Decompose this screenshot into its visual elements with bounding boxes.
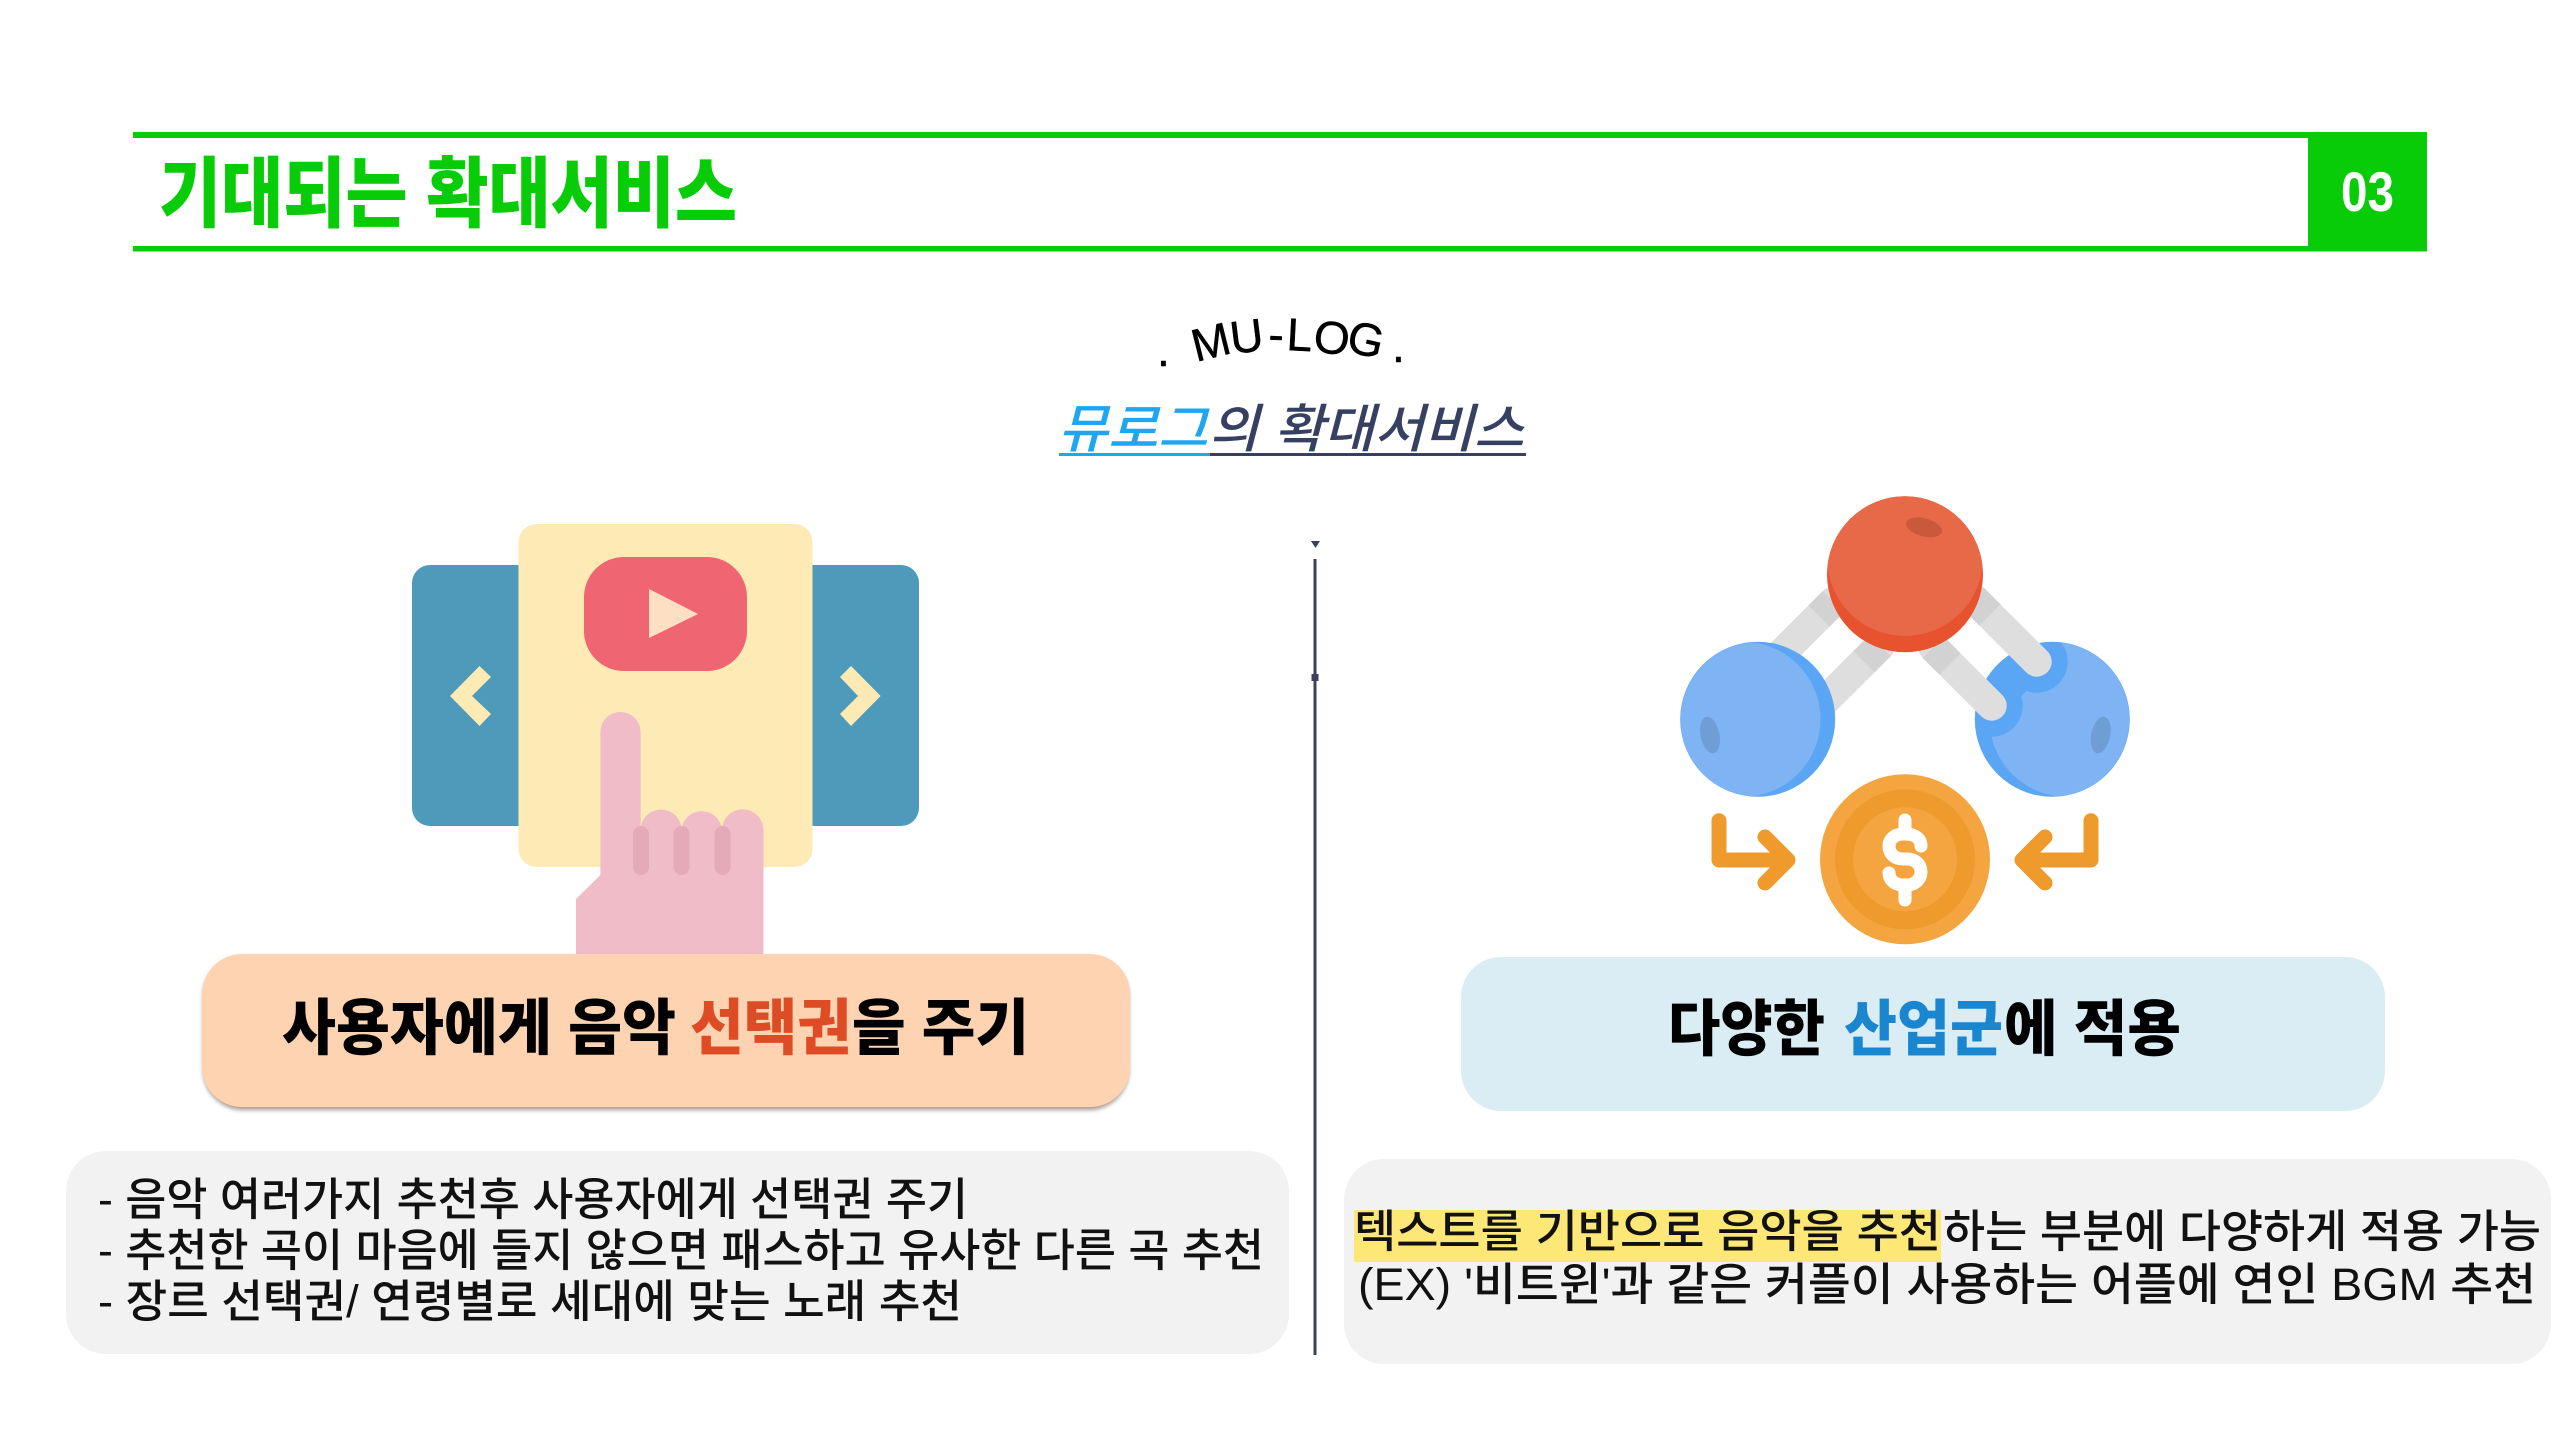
icon: video selection with pointing hand bbox=[412, 524, 919, 955]
panel: user choice details bbox=[66, 1151, 1289, 1354]
page number badge bbox=[2308, 132, 2427, 252]
arrow left bbox=[1719, 821, 1788, 883]
icon: molecule with coin bbox=[1666, 480, 2144, 944]
curved label: MU-LOG: . MU-LOG . bbox=[1157, 308, 1405, 376]
molecule sticks bbox=[1773, 602, 1880, 712]
stick shadows bbox=[1819, 598, 1990, 664]
subtitle: 의 확대서비스 bbox=[1209, 401, 1525, 459]
blue atom left bbox=[1666, 642, 1835, 797]
panel: industries details: (EX) '비트윈'과 같은 커플이 사용하는 어플에 연인 BGM 추천 bbox=[1358, 1259, 2536, 1310]
page number badge: 03 bbox=[2341, 160, 2394, 223]
subtitle bbox=[1058, 401, 1526, 459]
panel: industries heading: 다양한 bbox=[1668, 995, 1825, 1063]
panel: user choice heading: 사용자에게 음악 bbox=[282, 994, 676, 1062]
panel: user choice details: - 장르 선택권/ 연령별로 세대에 맞는 노래 추천 bbox=[98, 1276, 962, 1327]
panel: user choice details: - 음악 여러가지 추천후 사용자에게 선택권 주기 bbox=[98, 1174, 968, 1225]
panel: industries heading: 에 적용 bbox=[2004, 995, 2181, 1063]
panel: user choice heading bbox=[202, 954, 1130, 1110]
subtitle: 뮤로그 bbox=[1058, 401, 1210, 459]
red atom bbox=[1827, 480, 1983, 652]
coin bbox=[1820, 774, 1990, 944]
panel: user choice details: - 추천한 곡이 마음에 들지 않으면 패스하고 유사한 다른 곡 추천 bbox=[98, 1225, 1264, 1276]
panel: industries details bbox=[1344, 1159, 2551, 1364]
panel: industries heading bbox=[1461, 957, 2385, 1111]
panel: user choice heading: 선택권 bbox=[690, 994, 851, 1062]
panel: user choice heading: 을 주기 bbox=[852, 994, 1029, 1062]
header bar bbox=[133, 132, 2427, 252]
title: 기대되는 확대서비스 bbox=[159, 152, 737, 238]
panel: industries heading: 산업군 bbox=[1844, 995, 2003, 1063]
arrow right bbox=[2022, 821, 2091, 883]
blue atom right bbox=[1974, 642, 2130, 797]
panel: industries details: 텍스트를 기반으로 음악을 추천 bbox=[1354, 1206, 1941, 1257]
panel: industries details: 하는 부분에 다양하게 적용 가능 bbox=[1943, 1206, 2541, 1257]
center divider bbox=[1311, 541, 1320, 1355]
highlight bbox=[1354, 1210, 1941, 1262]
